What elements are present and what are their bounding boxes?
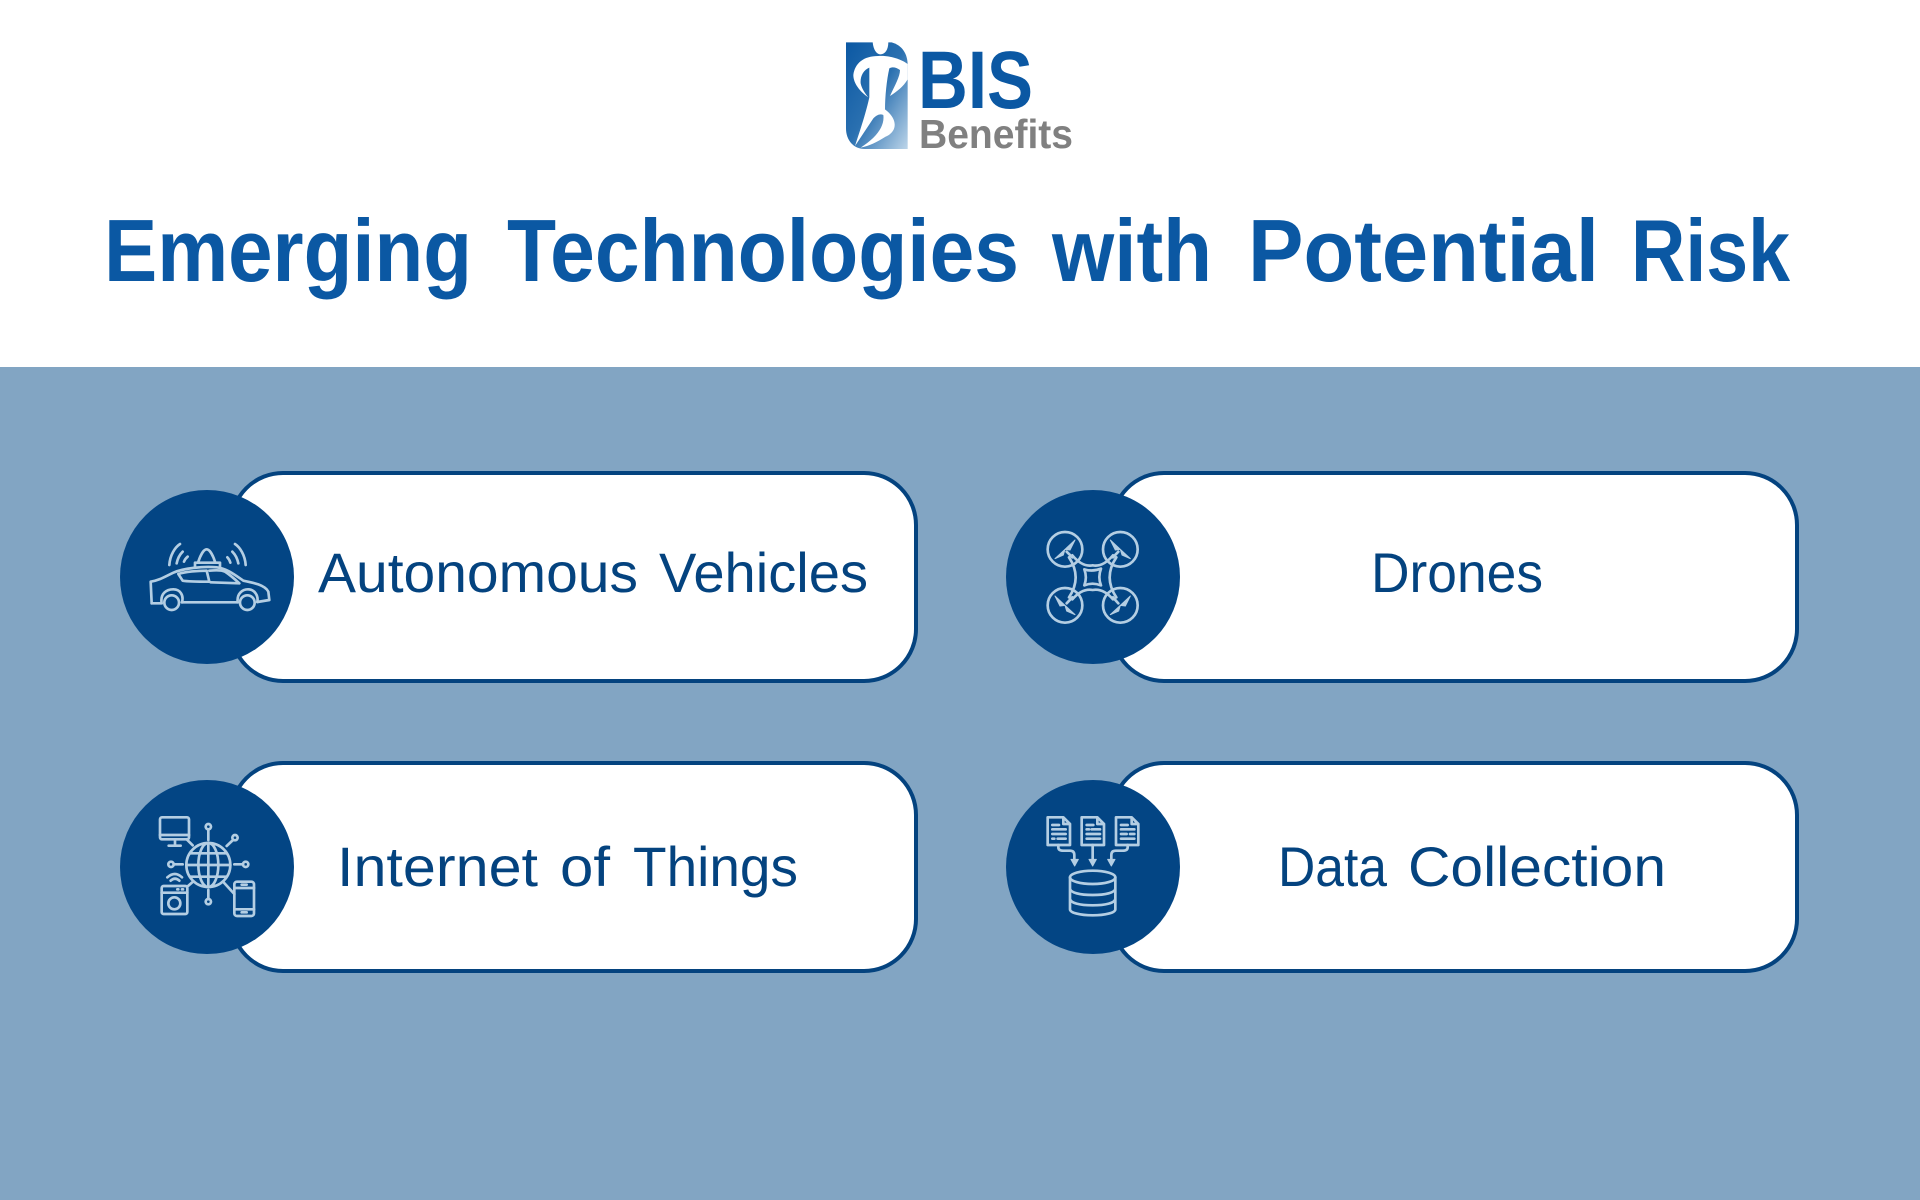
icon: autonomous car — [151, 544, 269, 610]
panel: blue background band — [0, 367, 1920, 1200]
card pill — [231, 473, 916, 681]
icon: internet of things — [160, 817, 254, 916]
logo: BIS Benefits — [846, 35, 1073, 157]
title: Technologies — [507, 201, 1019, 300]
icon circle — [120, 780, 294, 954]
label: Internet — [337, 835, 538, 898]
icon circle — [120, 490, 294, 664]
logo wordmark: BIS: BIS — [918, 35, 1033, 126]
icon: data collection — [1048, 817, 1138, 915]
card: Drones — [1006, 473, 1797, 681]
icon: drone — [1048, 532, 1138, 623]
card: Internet of Things — [120, 763, 916, 971]
label: Data — [1278, 835, 1388, 898]
title: Emerging — [104, 201, 472, 300]
label — [318, 541, 868, 604]
label: Drones — [1371, 541, 1543, 604]
card pill — [1112, 763, 1797, 971]
title: Potential — [1248, 201, 1599, 300]
logo mark: runner — [846, 42, 908, 149]
label: of — [560, 835, 610, 898]
logo wordmark: Benefits: Benefits — [919, 111, 1073, 157]
label — [337, 835, 798, 898]
card: Autonomous Vehicles — [120, 473, 916, 681]
label: Things — [633, 835, 798, 898]
label: Collection — [1408, 835, 1666, 898]
label: Autonomous — [318, 541, 638, 604]
title — [104, 201, 1791, 300]
card pill — [231, 763, 916, 971]
card pill — [1112, 473, 1797, 681]
card: Data Collection — [1006, 763, 1797, 971]
icon circle — [1006, 780, 1180, 954]
label — [1278, 835, 1666, 898]
title: with — [1051, 201, 1212, 300]
title: Risk — [1631, 201, 1791, 300]
label: Vehicles — [659, 541, 868, 604]
icon circle — [1006, 490, 1180, 664]
